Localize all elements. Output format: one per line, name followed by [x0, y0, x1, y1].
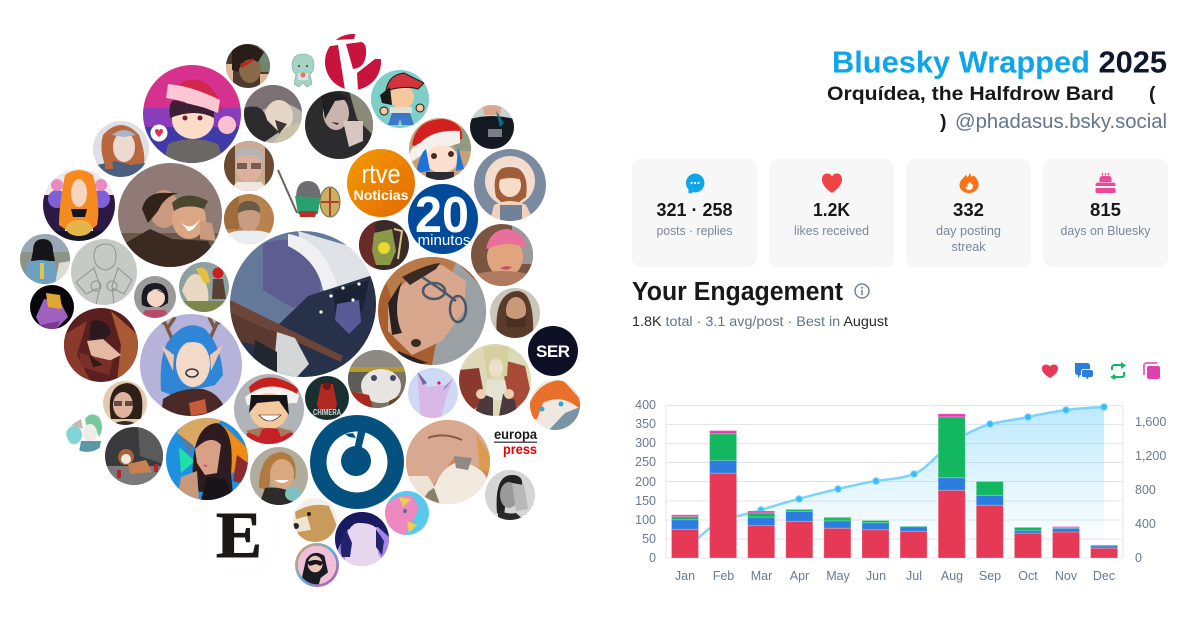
- display name: Orquídea, the Halfdrow Bard: [827, 83, 1114, 105]
- avatar: doll illustration: [474, 149, 546, 221]
- avatar: man with glasses: [224, 141, 274, 191]
- avatar: luffy with santa hat: [234, 374, 304, 444]
- bar: Oct: [1014, 527, 1041, 558]
- avatar: red cap cartoon kid: [371, 70, 429, 128]
- month labels: Jul: [906, 569, 922, 583]
- bar: Aug: [938, 414, 965, 558]
- stat card: posting streak: day posting: [936, 224, 1001, 238]
- logo: E serif: [200, 496, 278, 574]
- stat card: likes received: 1.2K: [813, 199, 851, 220]
- month labels: Nov: [1055, 569, 1078, 583]
- logo: E serif: E: [216, 499, 262, 572]
- left axis labels: 300: [635, 436, 656, 450]
- icon: flame: [960, 172, 979, 193]
- avatar: bearded long haired man: [490, 288, 540, 338]
- stat card: days on Bluesky: days on Bluesky: [1060, 224, 1151, 238]
- logo: P publication: [325, 34, 381, 90]
- avatar: purple figure on black: [30, 285, 74, 329]
- avatar: golden dog: [293, 498, 337, 542]
- month labels: Jan: [675, 569, 695, 583]
- avatar: dark illustrated man: [226, 44, 270, 88]
- avatar: cat in helmet: [348, 350, 406, 408]
- avatar: man with glasses selfie: [378, 257, 486, 365]
- month labels: Sep: [979, 569, 1001, 583]
- avatar: orange haired illustration: [43, 169, 115, 241]
- stat card: posting streak: 332: [953, 199, 984, 220]
- cumulative line: [685, 404, 1107, 548]
- logo: blue ring: [310, 415, 404, 509]
- avatar: man covering face black and white: [485, 470, 535, 520]
- avatar: orange haired android: [530, 380, 580, 430]
- bar: Sep: [976, 482, 1003, 558]
- avatar: deadpool on unicorn: [179, 262, 229, 312]
- engagement summary: 1.8K total · 3.1 avg/post · Best in August: [632, 313, 888, 329]
- icon: info: [855, 284, 869, 298]
- avatar: black shirt person: [470, 105, 514, 149]
- bar: Dec: [1091, 545, 1118, 558]
- grid lines: [666, 406, 1123, 558]
- display name: [827, 83, 1156, 133]
- avatar: santa hat blue haired anime: [409, 118, 471, 180]
- left axis labels: 400: [635, 398, 656, 412]
- month labels: May: [826, 569, 851, 583]
- logo: rtve Noticias: rtve: [362, 159, 400, 189]
- avatar: black haired anime girl: [134, 276, 176, 318]
- left axis labels: 50: [642, 532, 656, 546]
- display name: (: [1149, 83, 1156, 105]
- bar: May: [824, 517, 851, 558]
- left axis labels: 100: [635, 513, 656, 527]
- bar: Nov: [1052, 527, 1080, 558]
- logo: SER: [528, 326, 578, 376]
- bar: Jul: [900, 526, 927, 558]
- left axis labels: 350: [635, 417, 656, 431]
- logo: rtve Noticias: [347, 149, 415, 217]
- left axis labels: [635, 398, 656, 565]
- stat card: likes received: [769, 159, 894, 267]
- avatar: drow bard with violin: [230, 231, 376, 377]
- right axis labels: 1,200: [1135, 449, 1166, 463]
- right axis labels: 800: [1135, 483, 1156, 497]
- right axis labels: [1135, 415, 1166, 565]
- logo: SER: SER: [536, 342, 570, 361]
- avatar: blue haired figure: [335, 512, 389, 566]
- avatar cluster: [20, 32, 580, 587]
- month labels: Mar: [751, 569, 772, 583]
- avatar: anime group: [459, 344, 531, 416]
- bar: Feb: [710, 431, 737, 558]
- avatar: pencil sketch: [71, 239, 137, 305]
- avatar: chimera poster: CHIMERA: [313, 408, 341, 417]
- display name: ): [940, 111, 946, 133]
- stat card: posts and replies: posts · replies: [656, 224, 732, 238]
- bar: Apr: [786, 509, 813, 558]
- avatar: red toned painting: [64, 308, 138, 382]
- icon: reposts: [1110, 362, 1126, 380]
- month labels: Aug: [941, 569, 963, 583]
- avatar: man in white shirt: [224, 194, 274, 244]
- left axis labels: 200: [635, 475, 656, 489]
- handle: @phadasus.bsky.social: [955, 110, 1167, 133]
- bar: Mar: [748, 511, 775, 558]
- cumulative area: [685, 407, 1104, 558]
- chart legend icons: [1042, 362, 1160, 380]
- avatar: smiling blond person: [250, 447, 308, 505]
- avatar: woman with round glasses: [103, 381, 147, 425]
- title: Bluesky Wrapped 2025: [832, 46, 1167, 80]
- avatar: pink creature on blue: [385, 491, 429, 535]
- icon: cthulhu sticker: [292, 54, 314, 87]
- right axis labels: 400: [1135, 517, 1156, 531]
- bar: Jun: [862, 520, 889, 558]
- logo: europa press: [494, 426, 537, 457]
- avatar: green haired sketch: [66, 410, 108, 452]
- icon: heart: [822, 174, 842, 193]
- avatar: santa hat pride portrait: [143, 65, 241, 163]
- logo: 20 minutos: 20: [415, 186, 469, 243]
- avatar: man kissing cat: [406, 420, 490, 504]
- left axis labels: 250: [635, 455, 656, 469]
- avatar: pink haired selfie: [471, 224, 533, 286]
- icon: cake: [1096, 173, 1116, 193]
- avatar: monkey plush: [105, 427, 163, 485]
- avatar: masked heroine: [295, 543, 339, 587]
- stacked bars: [672, 414, 1118, 558]
- avatar: espeon: [408, 368, 458, 418]
- combo chart: monthly engagement: [635, 398, 1166, 583]
- month labels: Apr: [790, 569, 809, 583]
- avatar: chimera poster: [305, 376, 349, 420]
- heading: Your Engagement: Your Engagement: [632, 278, 843, 306]
- logo: rtve Noticias: Noticias: [353, 187, 409, 203]
- logo: 20 minutos: [408, 184, 478, 254]
- avatar: yellow armoured figure: [359, 220, 409, 270]
- right axis labels: 0: [1135, 551, 1142, 565]
- avatar: darth vader helmet man: [20, 234, 70, 284]
- stat card: posting streak: streak: [952, 240, 986, 254]
- stat card: posts and replies: [632, 159, 757, 267]
- avatar: laughing couple: [118, 163, 222, 267]
- icon: replies: [1075, 363, 1093, 380]
- stat card: posting streak: [906, 159, 1031, 267]
- icon: likes heart: [1042, 364, 1058, 378]
- left axis labels: 150: [635, 494, 656, 508]
- stat card: likes received: likes received: [794, 224, 869, 238]
- avatar: dark haired woman: [305, 91, 373, 159]
- avatar: red haired elf: [93, 121, 149, 177]
- icon: viking with shield: [278, 170, 340, 217]
- right axis labels: 1,600: [1135, 415, 1166, 429]
- stat card: posts and replies: 321 · 258: [656, 199, 732, 220]
- month labels: Jun: [866, 569, 886, 583]
- month labels: Feb: [713, 569, 734, 583]
- icon: quotes: [1144, 363, 1160, 379]
- logo: europa press: press: [503, 441, 537, 457]
- logo: 20 minutos: minutos: [418, 232, 470, 249]
- left axis labels: 0: [649, 551, 656, 565]
- bar: Jan: [672, 515, 698, 558]
- stat card: days on Bluesky: 815: [1090, 199, 1121, 220]
- avatar: blue haired elf with antlers: [140, 314, 242, 416]
- avatar: woman on colourful background: [166, 418, 248, 500]
- stat card: days on Bluesky: [1043, 159, 1168, 267]
- logo: europa press: europa: [494, 426, 537, 442]
- month labels: Oct: [1018, 569, 1038, 583]
- month labels: Dec: [1093, 569, 1115, 583]
- icon: speech bubble: [686, 174, 704, 194]
- month labels: [675, 569, 1115, 583]
- avatar: grey haired drawing: [244, 85, 302, 143]
